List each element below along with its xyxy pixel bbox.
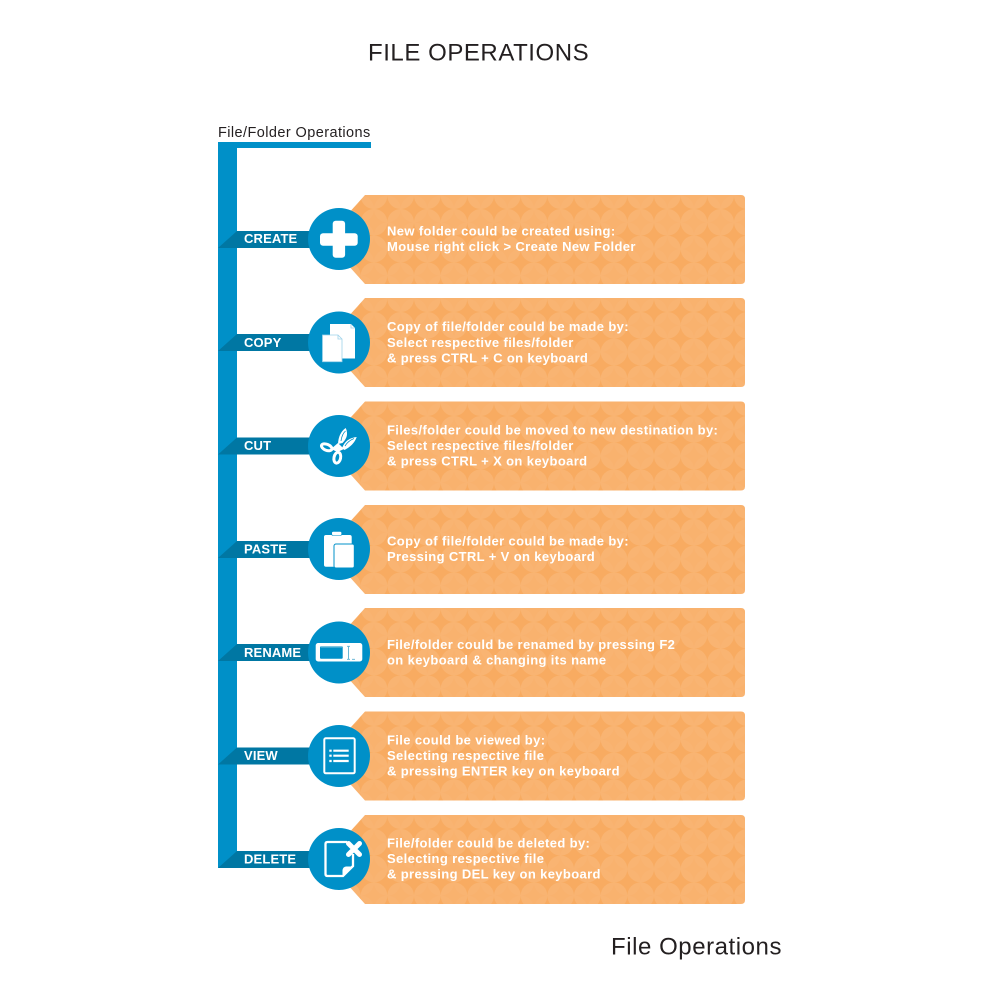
description: Pressing CTRL + V on keyboard [387,549,595,564]
description: File/folder could be deleted by: [387,836,590,850]
description: Copy of file/folder could be made by: [387,534,629,548]
panel: rename: RENAME [244,645,301,660]
icon: document with x [326,842,360,877]
panel: paste: PASTE [244,542,287,556]
description: & pressing ENTER key on keyboard [387,764,620,778]
description: Select respective files/folder [387,438,574,453]
description: Files/folder could be moved to new destination by: [387,422,718,438]
description: on keyboard & changing its name [387,652,607,668]
description: & press CTRL + X on keyboard [387,454,587,468]
panel: cut: CUT [244,438,271,453]
description: Selecting respective file [387,851,544,866]
panel: delete [218,815,745,904]
icon: document list [324,738,355,773]
description: Select respective files/folder [387,335,574,350]
description: Copy of file/folder could be made by: [387,319,629,334]
panel: view [218,712,745,800]
description: & press CTRL + C on keyboard [387,350,588,366]
description: New folder could be created using: [387,224,616,238]
description: Mouse right click > Create New Folder [387,239,636,254]
panel: delete: DELETE [244,852,296,866]
panel: copy [218,298,745,387]
title: FILE OPERATIONS [368,40,589,66]
description: File could be viewed by: [387,732,545,748]
caption: File Operations [611,934,782,960]
icon: documents [322,324,355,362]
icon: clipboard [324,532,354,568]
icon: rename field [316,643,362,662]
description: & pressing DEL key on keyboard [387,866,601,882]
panel: rename [218,608,745,697]
panel: create [218,195,745,284]
panel: paste [218,505,745,594]
tree trunk bar [218,142,371,868]
subtitle: File/Folder Operations: File/Folder Operations [218,125,371,141]
icon: scissors [320,428,357,464]
description: Selecting respective file [387,748,544,763]
panel: copy: COPY [244,335,282,350]
panel: cut [218,402,745,490]
icon: plus [320,221,358,258]
panel: create: CREATE [244,231,298,246]
description: File/folder could be renamed by pressing F2 [387,637,675,652]
panel: view: VIEW [244,748,278,763]
